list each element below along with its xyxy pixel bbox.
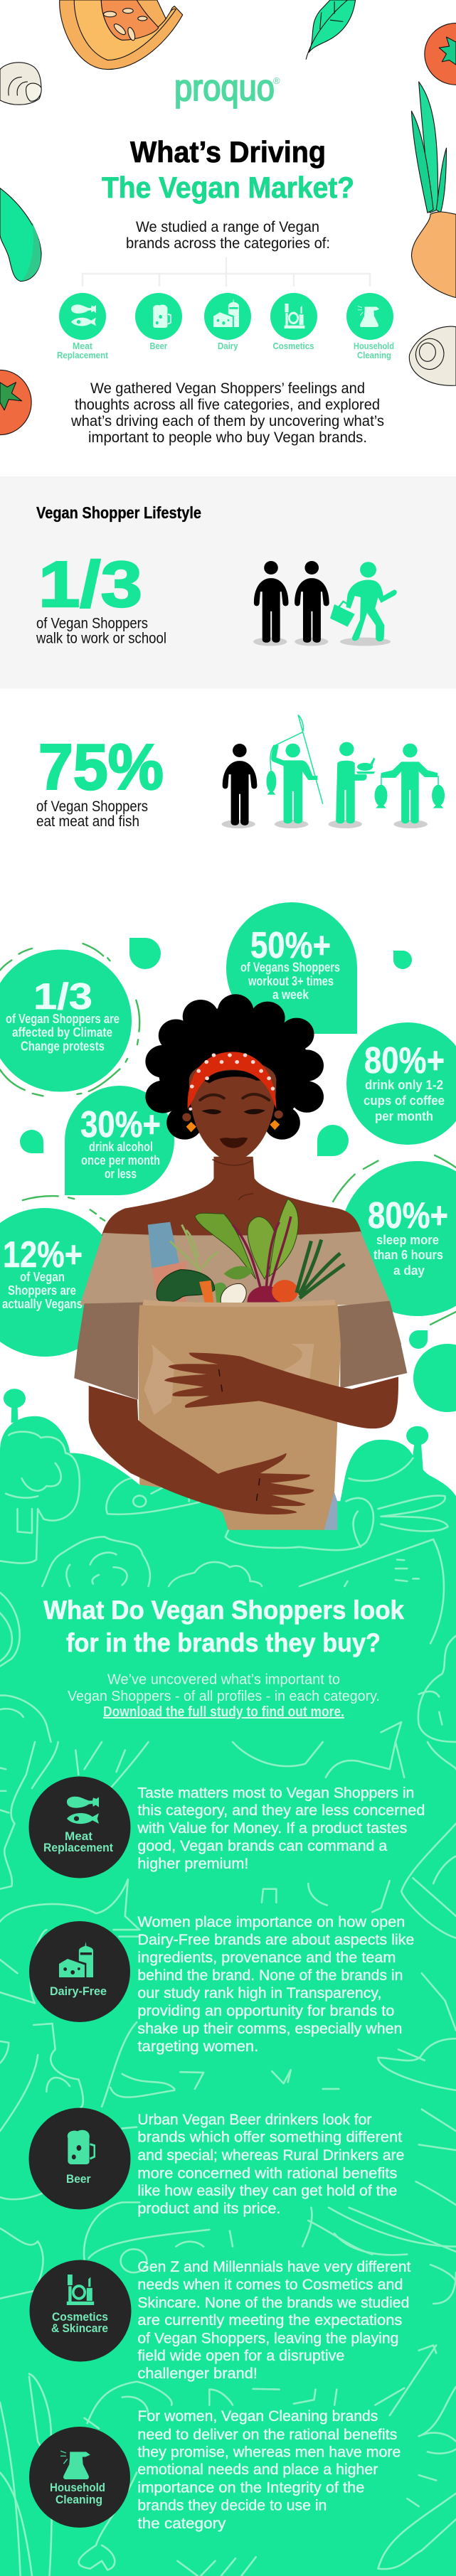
upper arm and hand [164, 1352, 398, 1428]
text: dairy-free insight: our study rank high in Transparency, [137, 1985, 381, 2002]
category: meat replacement: Replacement [57, 351, 109, 360]
text: beer insight [137, 2112, 404, 2217]
text: beer insight: product and its price. [137, 2201, 280, 2217]
heading: what do vegan shoppers look for: What Do Vegan Shoppers look [43, 1596, 404, 1625]
panel: lower green section with line art [0, 1389, 456, 2576]
badge: household cleaning [29, 2427, 130, 2528]
stat: one third walk [36, 549, 166, 647]
category: dairy: Dairy [218, 341, 238, 351]
text: meat replacement insight: this category, and they are less concerned [137, 1802, 425, 1819]
facial features [200, 1094, 269, 1100]
badge: meat replacement: Meat [65, 1829, 92, 1843]
text: dairy-free insight: targeting women. [137, 2038, 258, 2055]
stat: 75 percent: eat meat and fish [36, 813, 139, 830]
illustration: woman holding grocery bag [74, 994, 407, 1530]
text: cosmetics insight: needs when it comes to Cosmetics and [137, 2277, 403, 2293]
bubble: 80 percent sleep: a day [393, 1263, 425, 1278]
title [102, 135, 354, 204]
text: beer insight: and special; whereas Rural Drinkers are [137, 2147, 404, 2164]
row: cosmetics and skincare [30, 2259, 411, 2382]
category: meat replacement: Meat [73, 341, 93, 351]
text: dairy-free insight: behind the brand. None of the brands in [137, 1967, 403, 1984]
text: cosmetics insight: of Vegan Shoppers, leaving the playing [137, 2331, 398, 2346]
bubble: 30 percent alcohol: 30%+ [80, 1104, 161, 1145]
bag body [138, 1343, 341, 1530]
category tree connector [83, 257, 370, 287]
logo: proquo: proquo [174, 68, 275, 109]
row: meat replacement [28, 1776, 425, 1878]
text: dairy-free insight: shake up their comms, especially when [137, 2021, 402, 2037]
intro text: brands across the categories of: [126, 235, 330, 252]
badge: cosmetics and skincare: Cosmetics [52, 2310, 108, 2324]
bubble: 80 percent sleep: sleep more [376, 1233, 439, 1247]
bubble: 30 percent alcohol: or less [105, 1167, 137, 1181]
category: dairy [204, 293, 251, 351]
bubble: 50 percent workout: workout 3+ times [248, 974, 334, 988]
badge: beer [28, 2107, 131, 2210]
vegetables [157, 1199, 344, 1303]
text: household cleaning insight: brands they decide to use in [137, 2497, 327, 2514]
text: meat replacement insight: Taste matters most to Vegan Shoppers in [137, 1785, 414, 1802]
bubble: 12 percent actual vegans: of Vegan [20, 1270, 65, 1284]
text: beer insight: more concerned with rational benefits [137, 2166, 397, 2181]
stat: one third walk: walk to work or school [36, 630, 166, 647]
title: What’s Driving [130, 135, 326, 169]
text: cosmetics insight: field wide open for a disruptive [137, 2348, 344, 2364]
logo: proquo: ® [273, 75, 280, 86]
category: cosmetics [270, 293, 317, 351]
icon: onion [411, 82, 456, 298]
text: beer insight: like how easily they can get hold of the [137, 2183, 397, 2199]
text: dairy-free insight: ingredients, provenance and the team [137, 1950, 396, 1966]
bubble: 12 percent actual vegans: Shoppers are [8, 1283, 76, 1298]
text: dairy-free insight: Women place importance on how open [137, 1914, 405, 1930]
text: household cleaning insight: importance on the Integrity of the [137, 2480, 364, 2496]
woman lower body [74, 1343, 407, 1530]
bubble: 12 percent actual vegans [0, 1208, 120, 1357]
intro text [126, 219, 330, 252]
badge: cosmetics and skincare: & Skincare [51, 2321, 108, 2335]
stat: one third walk: 1/3 [38, 549, 142, 621]
shirt behind bag [324, 1489, 337, 1530]
bubble: 80 percent coffee [346, 1022, 456, 1145]
bubble: 80 percent sleep: than 6 hours [373, 1248, 443, 1262]
text: household cleaning insight: they promise, whereas men have more [137, 2444, 401, 2461]
line art: bottom vegetables [0, 2181, 456, 2576]
intro paragraph: thoughts across all five categories, and explored [75, 397, 380, 413]
bubble: 50 percent workout: a week [272, 988, 309, 1002]
icon: cucumber [0, 188, 41, 282]
stat: 75 percent: of Vegan Shoppers [36, 798, 148, 815]
intro paragraph [70, 380, 384, 446]
bubble: 12 percent actual vegans: 12%+ [3, 1234, 83, 1276]
line art: middle vegetables [0, 1742, 456, 2150]
icon: mushroom right [409, 326, 456, 385]
badge: dairy-free: Dairy-Free [50, 1984, 107, 1998]
text: household cleaning insight: the category [137, 2516, 226, 2532]
text: cosmetics insight: Gen Z and Millennials have very different [137, 2259, 411, 2275]
bubble: 80 percent sleep [340, 1161, 456, 1316]
blouse [80, 1231, 391, 1305]
headband [188, 1052, 276, 1111]
bubble: 80 percent coffee: per month [375, 1109, 433, 1123]
badge: dairy-free [29, 1921, 130, 2022]
bubble: 1/3 climate protests: Change protests [21, 1040, 105, 1054]
icon: mushroom left [0, 63, 41, 105]
category: household cleaning: Cleaning [357, 351, 391, 360]
badge: household cleaning: Household [50, 2481, 105, 2494]
bubble: 50 percent workout: of Vegans Shoppers [240, 960, 340, 974]
bubble: 80 percent coffee: drink only 1-2 [365, 1078, 443, 1092]
text: beer insight: Urban Vegan Beer drinkers look for [137, 2112, 371, 2128]
text: household cleaning insight [137, 2408, 401, 2532]
sleeves [74, 1343, 407, 1400]
row: household cleaning [29, 2408, 401, 2532]
section intro text [68, 1672, 380, 1720]
text: meat replacement insight [137, 1785, 425, 1872]
section intro text: Download the full study to find out more. [103, 1704, 344, 1720]
text: cosmetics insight [137, 2259, 411, 2382]
bubble: 30 percent alcohol: drink alcohol [89, 1140, 153, 1154]
panel: category icons [57, 293, 394, 360]
text: dairy-free insight [137, 1914, 414, 2055]
category: meat replacement [57, 293, 109, 360]
dashed accent arcs [0, 944, 456, 1325]
stat: one third walk: of Vegan Shoppers [36, 616, 148, 631]
hair [145, 994, 324, 1140]
category: cosmetics: Cosmetics [273, 341, 314, 351]
section intro text: Vegan Shoppers - of all profiles - in each category. [68, 1689, 380, 1704]
bubble: 1/3 climate protests [0, 950, 132, 1092]
section intro text: We’ve uncovered what’s important to [107, 1672, 340, 1688]
intro text: We studied a range of Vegan [136, 219, 319, 235]
text: household cleaning insight: emotional needs and place a higher [137, 2462, 378, 2478]
intro paragraph: what’s driving each of them by uncovering what’s [70, 413, 384, 429]
text: household cleaning insight: For women, Vegan Cleaning brands [137, 2408, 378, 2425]
badge: cosmetics and skincare [30, 2260, 131, 2362]
bubble: 50 percent workout [226, 902, 357, 1034]
title: The Vegan Market? [102, 171, 354, 204]
pictogram: four people with fish and meat [222, 715, 445, 828]
bubble: 1/3 climate protests: of Vegan Shoppers are [6, 1012, 120, 1026]
icon: green leaf [306, 0, 356, 60]
text: meat replacement insight: higher premium! [137, 1856, 248, 1872]
bubble: 1/3 climate protests: 1/3 [33, 976, 92, 1017]
decorative drops [20, 938, 456, 1412]
bubble: 80 percent coffee: cups of coffee [364, 1094, 445, 1108]
lower arm and hand [89, 1386, 314, 1514]
bubble: 1/3 climate protests: affected by Climate [12, 1025, 112, 1040]
panel: stat bubbles [0, 902, 456, 1412]
category: beer [135, 293, 182, 351]
stat: 75 percent: 75% [38, 732, 164, 803]
text: dairy-free insight: Dairy-Free brands are about aspects like [137, 1932, 414, 1948]
text: dairy-free insight: providing an opportunity for brands to [137, 2003, 394, 2019]
icon: pumpkin slice [60, 0, 183, 70]
text: meat replacement insight: good, Vegan brands can command a [137, 1838, 388, 1854]
badge: meat replacement [28, 1776, 131, 1878]
category: household cleaning [346, 293, 394, 360]
badge: household cleaning: Cleaning [55, 2493, 102, 2506]
row: dairy-free [29, 1914, 414, 2055]
icon: tomato left [0, 370, 31, 435]
badge: meat replacement: Replacement [43, 1841, 113, 1854]
category: household cleaning: Household [354, 341, 394, 351]
woman upper body [78, 994, 401, 1345]
category: beer: Beer [149, 341, 167, 351]
text: household cleaning insight: need to deliver on the rational benefits [137, 2427, 397, 2443]
bubble: 50 percent workout: 50%+ [250, 925, 331, 966]
paper bag top [138, 1303, 341, 1345]
neck and shoulders [102, 1157, 362, 1236]
face [189, 1060, 276, 1163]
bubble: 30 percent alcohol: once per month [81, 1153, 160, 1167]
intro paragraph: important to people who buy Vegan brands. [88, 429, 367, 446]
panel: header illustrations [0, 0, 456, 435]
text: meat replacement insight: with Value for Money. If a product tastes [137, 1820, 407, 1837]
text: cosmetics insight: Skincare. None of the brands we studied [137, 2295, 409, 2311]
panel: lifestyle grey background [0, 476, 456, 688]
badge: beer: Beer [66, 2172, 91, 2186]
icon: tomato right [425, 23, 456, 85]
heading: Vegan Shopper Lifestyle: Vegan Shopper Lifestyle [36, 503, 201, 522]
intro paragraph: We gathered Vegan Shoppers’ feelings and [90, 380, 365, 397]
heading: what do vegan shoppers look for: for in the brands they buy? [66, 1628, 381, 1657]
text: beer insight: brands which offer something different [137, 2129, 403, 2146]
bubble: 12 percent actual vegans: actually Vegans [2, 1297, 83, 1311]
line art: top vegetables [0, 1432, 456, 1742]
bubble: 30 percent alcohol [65, 1086, 174, 1195]
row: beer [28, 2107, 404, 2217]
pictogram: three people, one walking [253, 561, 397, 646]
heading: what do vegan shoppers look for [43, 1596, 404, 1657]
text: cosmetics insight: are currently meeting the expectations [137, 2312, 402, 2329]
green blob background [0, 1389, 456, 1547]
text: cosmetics insight: challenger brand! [137, 2366, 258, 2382]
